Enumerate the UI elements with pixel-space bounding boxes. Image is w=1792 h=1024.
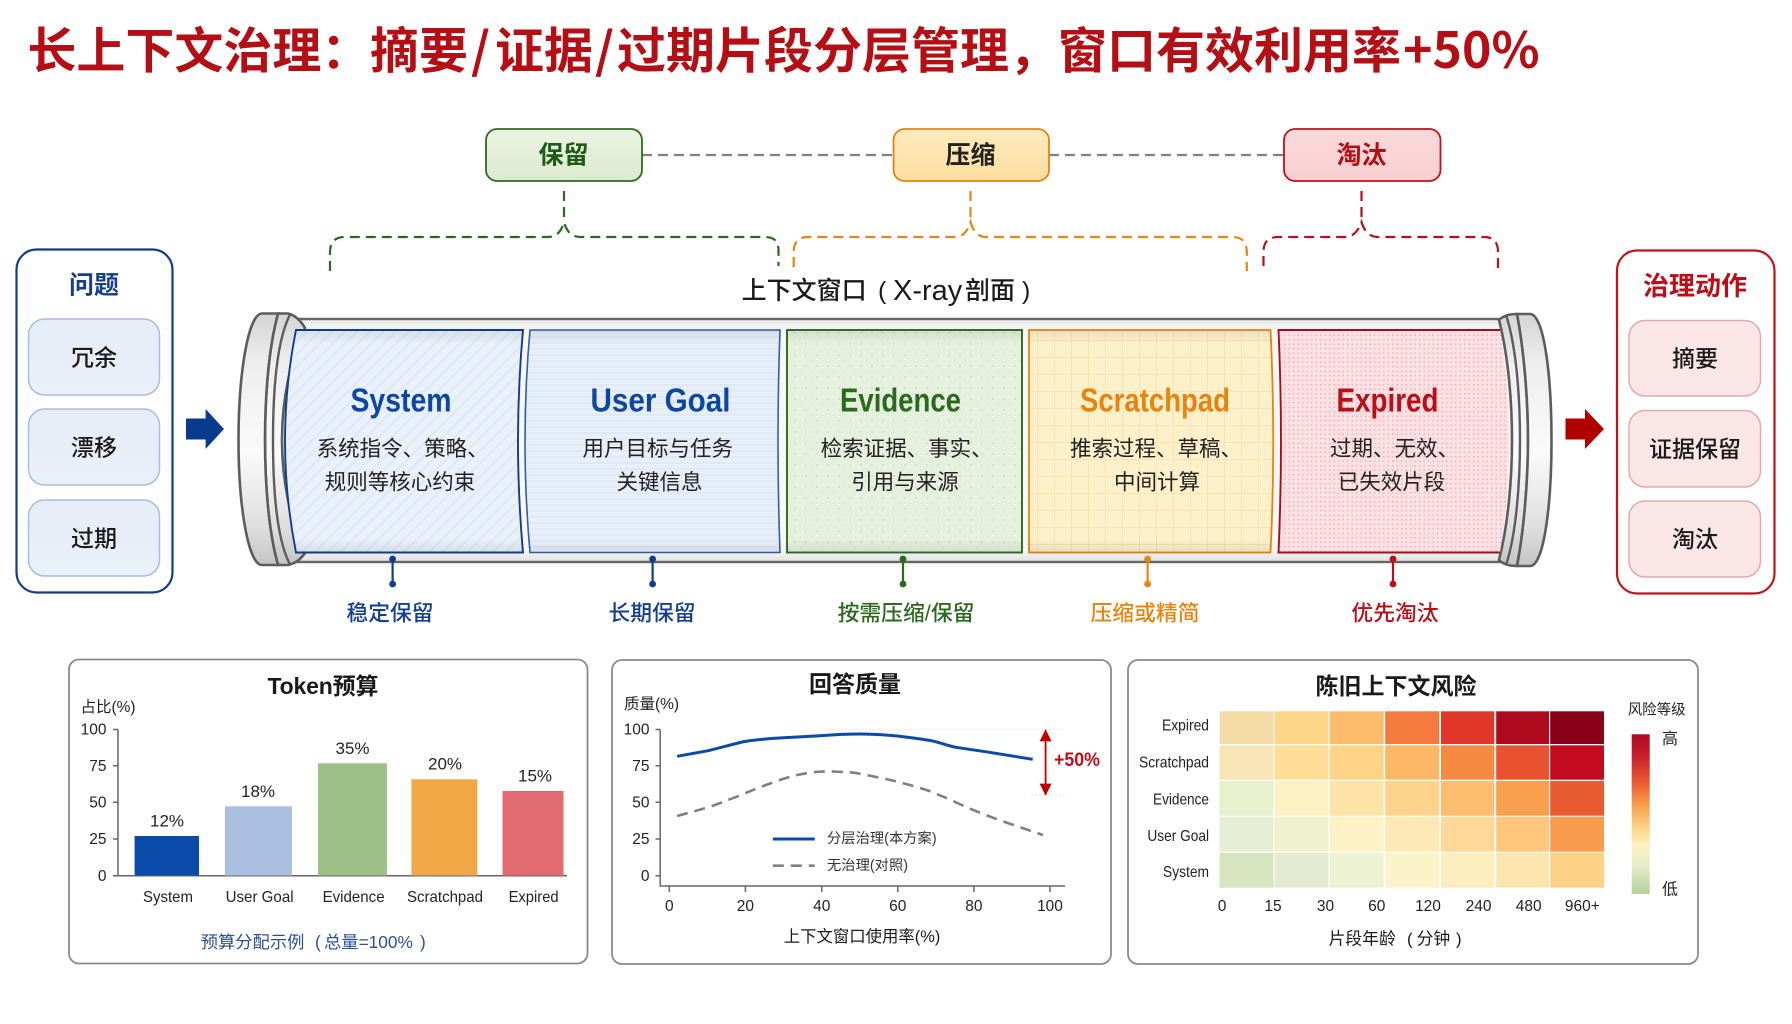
bar: Expired 15%: Expired [509, 889, 559, 906]
line chart: quality vs usage: 25 [632, 831, 650, 848]
tag: retain: 保留 [538, 142, 589, 170]
axis title: fragment age: ( [1407, 929, 1413, 948]
segment: Scratchpad: 中间计算 [1114, 470, 1200, 494]
bar: Expired 15% [502, 766, 564, 906]
title: 过期片段分层管理， [617, 12, 1058, 82]
axis title: window usage: 上下文窗口使用率(%) [784, 928, 940, 946]
annotation: +50% gap: +50% [1054, 749, 1100, 771]
heatmap: risk by age: 0 [1218, 898, 1227, 915]
item: redundant: 冗余 [71, 344, 117, 370]
panel: stale context risk [1128, 660, 1698, 964]
callout: compress or trim [1090, 556, 1200, 626]
panel: answer quality [612, 660, 1111, 964]
bar chart: budget share: 50 [89, 794, 107, 812]
heatmap: risk by age: 60 [1368, 898, 1386, 915]
segment: Evidence [787, 330, 1022, 552]
line chart: quality vs usage [624, 695, 1100, 915]
line chart: quality vs usage: 60 [889, 898, 907, 915]
heatmap: risk by age: Evidence [1153, 792, 1209, 808]
callout: long term retain [608, 556, 696, 626]
segment: Expired: Expired [1336, 382, 1438, 418]
segment: Evidence: 检索证据、事实、 [821, 437, 993, 461]
heatmap: risk by age: 960+ [1565, 898, 1600, 915]
action: evict: 淘汰 [1672, 526, 1718, 552]
tag: retain [486, 129, 642, 181]
bar: System 12%: 12% [150, 812, 184, 830]
axis title: fragment age: 分钟 [1417, 929, 1450, 948]
right end cap [1499, 314, 1552, 566]
line chart: quality vs usage: 100 [1037, 898, 1063, 915]
heading: context window: 上下文窗口 [742, 277, 867, 305]
segment: System [285, 330, 523, 552]
tag: compress [894, 129, 1049, 181]
title: 证据 [495, 12, 593, 82]
heatmap: risk by age: System [1163, 864, 1209, 881]
callout: compress or retain on demand: 按需压缩/保留 [838, 600, 974, 626]
callout: long term retain: 长期保留 [608, 600, 696, 626]
bracket: compress [794, 191, 1247, 271]
annotation: +50% gap [1046, 730, 1100, 795]
bracket: evict [1264, 191, 1498, 271]
action: evict [1629, 501, 1760, 577]
item: drift [28, 409, 160, 485]
arrow: window to actions [1566, 409, 1604, 449]
bar: User Goal 18% [225, 782, 294, 906]
legend: line series: 无治理(对照) [827, 857, 908, 874]
bar chart: budget share: 0 [98, 868, 107, 885]
segment: User Goal: 用户目标与任务 [583, 437, 733, 461]
bar chart: budget share: 占比(%) [80, 698, 136, 716]
tag: evict: 淘汰 [1336, 142, 1387, 170]
panel: token budget [69, 660, 588, 964]
heatmap: risk by age: Expired [1162, 718, 1209, 734]
heading: context window: X-ray [893, 275, 963, 307]
bar: Scratchpad 20%: Scratchpad [407, 889, 483, 906]
heatmap: risk by age [1139, 711, 1604, 915]
tag: compress: 压缩 [945, 142, 996, 170]
item: expired: 过期 [71, 526, 117, 552]
segment: Scratchpad: 推索过程、草稿、 [1070, 437, 1242, 461]
title: / [595, 12, 614, 82]
line chart: quality vs usage: 20 [737, 898, 754, 915]
heading: answer quality: 回答质量 [809, 671, 901, 697]
title: 长上下文治理： [27, 12, 370, 82]
heatmap: risk by age: 30 [1317, 898, 1334, 915]
bracket: retain [330, 191, 778, 271]
segment: System: 系统指令、策略、 [317, 437, 489, 461]
action: summarize [1629, 320, 1760, 396]
tube body [270, 319, 1525, 562]
segment: User Goal [525, 330, 780, 552]
segment: Expired: 过期、无效、 [1330, 437, 1459, 461]
heatmap: risk by age: Scratchpad [1139, 754, 1209, 772]
heatmap: risk by age: 15 [1264, 898, 1282, 915]
callout: compress or trim: 压缩或精简 [1090, 600, 1200, 626]
callout: evict first: 优先淘汰 [1351, 600, 1439, 626]
item: redundant [28, 319, 160, 395]
segment: User Goal: 关键信息 [616, 470, 703, 494]
bar: System 12%: System [143, 889, 193, 906]
action: summarize: 摘要 [1672, 346, 1718, 372]
callout: evict first [1351, 556, 1439, 626]
bar: Evidence 35% [318, 739, 387, 906]
bar: User Goal 18%: 18% [241, 782, 275, 801]
heading: context window: ( [878, 277, 887, 305]
heading: token budget: Token预算 [268, 673, 378, 699]
legend: risk scale: 低 [1662, 880, 1678, 898]
bar chart: budget share: 25 [89, 831, 106, 848]
panel: governance actions [1617, 250, 1774, 594]
legend: line series: 分层治理(本方案) [827, 829, 937, 847]
line chart: quality vs usage: 75 [632, 758, 650, 775]
segment: Expired: 已失效片段 [1338, 470, 1445, 494]
line chart: quality vs usage: 100 [624, 722, 650, 738]
left end cap [238, 314, 305, 565]
item: drift: 漂移 [71, 434, 117, 460]
heading: problems: 问题 [69, 272, 119, 300]
segment: User Goal: User Goal [590, 382, 730, 418]
heading: actions: 治理动作 [1643, 271, 1747, 301]
bar chart: budget share: 75 [89, 758, 106, 775]
legend: risk scale [1628, 700, 1686, 898]
action: keep evidence [1629, 410, 1760, 487]
diagram: context window tube [238, 314, 1552, 566]
action: keep evidence: 证据保留 [1649, 436, 1741, 462]
caption: budget example: ) [420, 932, 426, 952]
axis title: fragment age: 片段年龄 [1329, 929, 1396, 948]
bar: User Goal 18%: User Goal [226, 889, 294, 906]
heatmap: risk by age: 120 [1415, 898, 1441, 915]
panel: problems [16, 250, 172, 592]
bar: Scratchpad 20% [407, 754, 483, 906]
series: no governance [677, 771, 1043, 835]
heatmap: risk by age: 240 [1466, 898, 1492, 915]
title: / [471, 12, 490, 82]
legend: risk scale: 高 [1662, 730, 1678, 748]
legend: risk scale: 风险等级 [1628, 700, 1686, 718]
line chart: quality vs usage: 0 [665, 898, 674, 915]
legend: line series [773, 829, 937, 874]
segment: Scratchpad: Scratchpad [1080, 382, 1230, 418]
title: +50% [1403, 11, 1540, 83]
segment: System: System [350, 382, 452, 418]
callout: stable retain [346, 556, 434, 626]
connector: action tags [642, 154, 1284, 156]
segment: Expired [1278, 330, 1509, 552]
segment: Scratchpad [1029, 330, 1273, 552]
tag: evict [1284, 129, 1440, 181]
series: layered governance [677, 734, 1033, 759]
line chart: quality vs usage: 40 [813, 898, 831, 915]
heatmap: risk by age: User Goal [1147, 828, 1209, 845]
caption: budget example: 预算分配示例 [201, 932, 304, 952]
caption: budget example: 总量=100% [324, 932, 413, 952]
arrow: problems to window [186, 409, 224, 449]
heading: stale context risk: 陈旧上下文风险 [1316, 673, 1476, 699]
bar chart: budget share [80, 698, 567, 906]
bar: Scratchpad 20%: 20% [428, 754, 462, 774]
callout: compress or retain on demand [838, 556, 974, 626]
heatmap: risk by age: 480 [1516, 898, 1542, 915]
line chart: quality vs usage: 质量(%) [624, 695, 679, 713]
line chart: quality vs usage: 50 [632, 794, 650, 812]
bar: Evidence 35%: Evidence [323, 889, 385, 906]
title: 窗口有效利用率 [1058, 12, 1401, 82]
bar: Evidence 35%: 35% [335, 739, 370, 758]
bar: System 12% [135, 812, 199, 906]
item: expired [28, 500, 160, 576]
line chart: quality vs usage: 80 [965, 898, 983, 915]
axis title: fragment age: ) [1456, 929, 1462, 948]
segment: System: 规则等核心约束 [325, 470, 475, 494]
bar: Expired 15%: 15% [518, 766, 552, 786]
segment: Evidence: Evidence [840, 382, 961, 418]
segment: Evidence: 引用与来源 [851, 470, 959, 494]
bar chart: budget share: 100 [81, 722, 107, 738]
callout: stable retain: 稳定保留 [346, 600, 434, 626]
line chart: quality vs usage: 0 [641, 868, 650, 885]
caption: budget example: ( [315, 932, 321, 952]
title: 摘要 [370, 12, 468, 82]
heading: context window: ) [1022, 277, 1030, 305]
heading: context window: 剖面 [965, 277, 1015, 305]
